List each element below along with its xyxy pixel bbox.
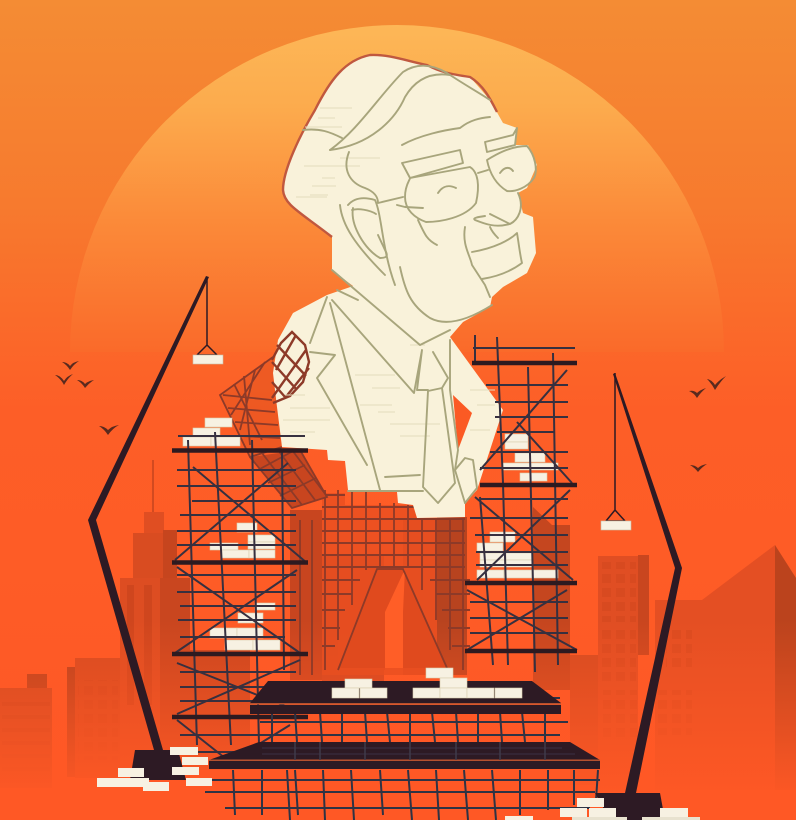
scaffold poles — [467, 335, 577, 672]
statue head and torso — [272, 55, 537, 518]
birds right — [689, 376, 726, 472]
crane arm — [88, 276, 209, 750]
crane hook and brick — [601, 373, 631, 530]
side hole between arm and body — [453, 395, 472, 450]
right crane — [505, 373, 700, 820]
stage grid lines — [205, 698, 600, 820]
statue arm net — [220, 357, 327, 508]
crane hook and brick — [193, 277, 223, 364]
hair outline — [283, 55, 497, 237]
lower stage platform — [209, 742, 600, 769]
birds left — [55, 361, 119, 435]
scaffold platforms — [172, 450, 308, 717]
right scaffolding — [465, 335, 577, 672]
left crane — [88, 276, 223, 791]
bricks on left scaffold — [183, 418, 280, 650]
setting sun — [70, 25, 724, 352]
head silhouette — [283, 55, 537, 325]
city skyline — [0, 460, 796, 800]
scaffold platforms — [465, 363, 577, 651]
left scaffolding — [172, 418, 308, 762]
face line work — [303, 66, 536, 503]
upper stage platform — [250, 668, 561, 714]
scaffold poles — [175, 432, 307, 762]
crane base with bricks — [97, 747, 212, 791]
crane arm — [613, 373, 682, 793]
crane base with bricks — [505, 793, 700, 820]
faint brick lines — [283, 108, 495, 436]
torso — [273, 270, 503, 518]
bricks on right scaffold — [477, 434, 558, 578]
upper arm net — [272, 332, 309, 403]
statue legs with net — [300, 490, 470, 675]
bricks on upper platform — [332, 668, 522, 698]
